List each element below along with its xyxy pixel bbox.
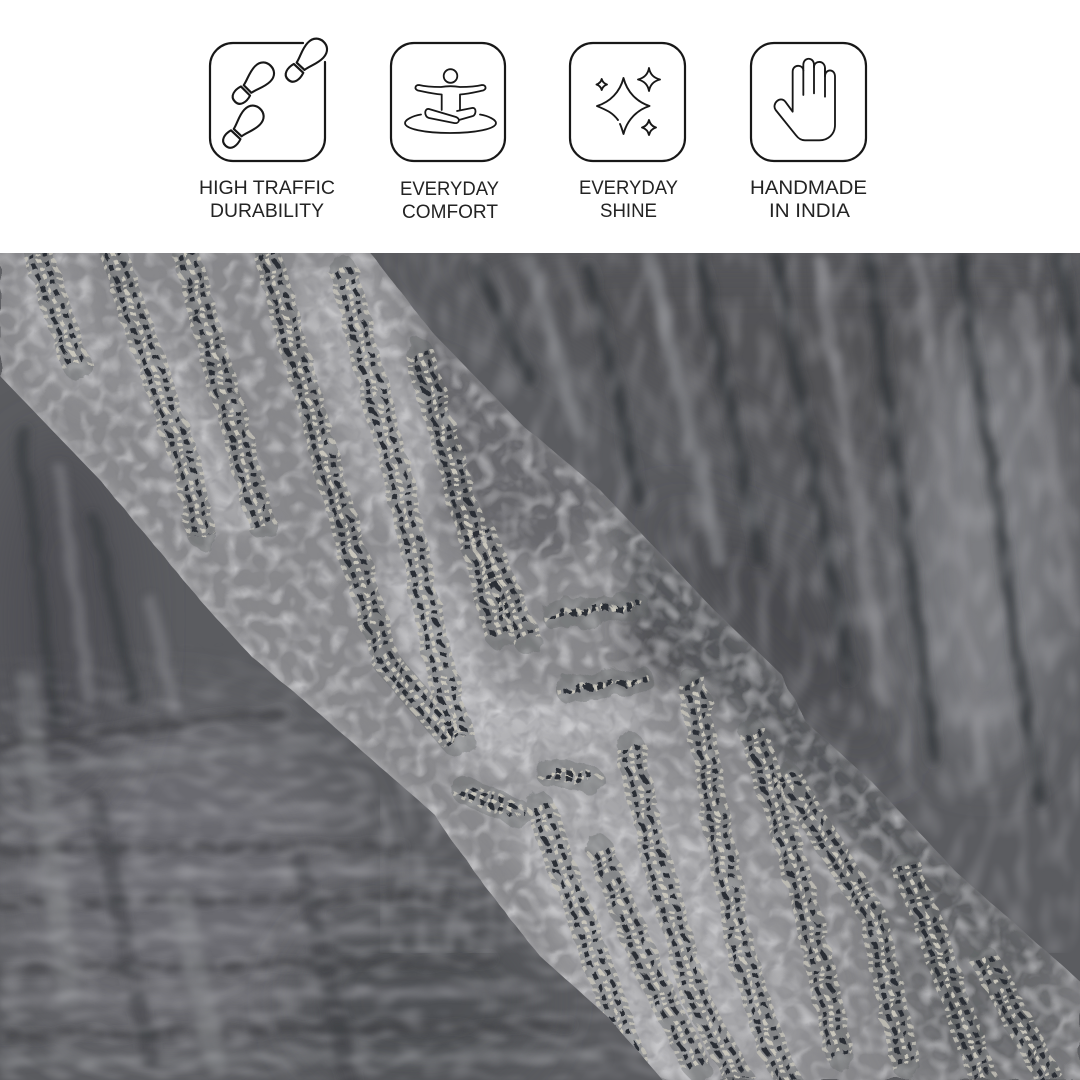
label: handmade in india [750, 178, 867, 222]
left side ribs [22, 430, 135, 720]
label: handmade in india: IN INDIA [769, 201, 850, 222]
rug background surface, out of focus [0, 253, 1080, 1080]
icon frame [751, 43, 866, 161]
small sparkle top left [596, 79, 607, 90]
small sparkle bottom right [642, 120, 656, 135]
large sparkle [597, 78, 650, 134]
rolled rug edge [0, 240, 1080, 1080]
figure arms and torso [415, 85, 486, 110]
label: everyday shine [579, 178, 678, 222]
hand outline [774, 59, 835, 140]
footprint top right [280, 34, 331, 87]
label: high traffic durability: DURABILITY [210, 201, 324, 222]
label: everyday comfort: COMFORT [402, 202, 498, 223]
icon frame with gap at top right [210, 43, 325, 161]
lower left rows [0, 710, 570, 1035]
label: high traffic durability [199, 178, 335, 222]
label: high traffic durability: HIGH TRAFFIC [199, 178, 335, 199]
label: everyday comfort [400, 179, 499, 223]
footprint lower left [218, 101, 268, 153]
out of focus fibre texture [380, 253, 1080, 953]
icon: everyday shine, sparkles [570, 43, 685, 161]
figure head [444, 69, 457, 83]
label: everyday shine: SHINE [600, 201, 657, 222]
ribs [0, 255, 1080, 1080]
small sparkle top right [638, 68, 660, 91]
photo: rolled grey rug close-up [0, 240, 1080, 1080]
tonal zones [0, 260, 1080, 1080]
mat [405, 114, 496, 133]
label: handmade in india: HANDMADE [750, 178, 867, 199]
footprint upper left [227, 58, 278, 109]
label: everyday comfort: EVERYDAY [400, 179, 499, 200]
icon: everyday comfort, seated figure [391, 43, 505, 161]
page background [0, 0, 1080, 253]
pile lumps [0, 240, 1080, 1080]
label: everyday shine: EVERYDAY [579, 178, 678, 199]
icon frame [391, 43, 505, 161]
icon: handmade in india, hand [751, 43, 866, 161]
icon frame [570, 43, 685, 161]
icon: high traffic durability, footprints [210, 34, 331, 161]
figure legs [425, 109, 459, 123]
woven stripes [25, 250, 1062, 1080]
